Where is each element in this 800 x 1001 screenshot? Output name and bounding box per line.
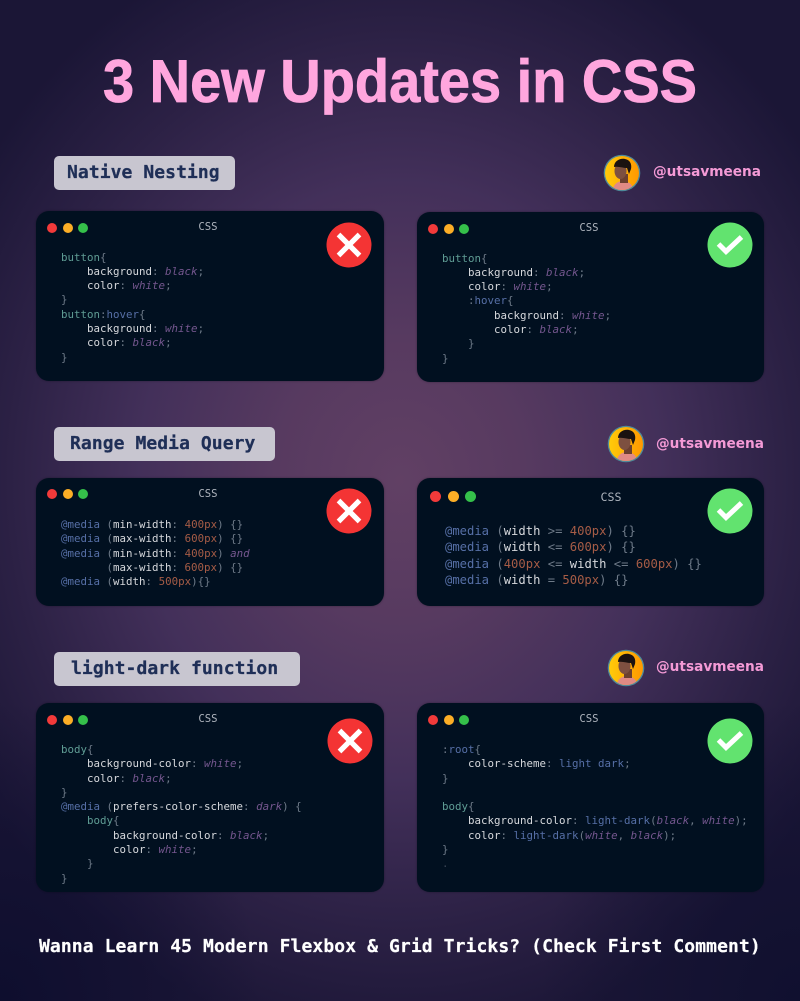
code: range before: @media (min-width: 400px) {} @media (max-width: 600px) {} @media (min-width: 400px) and (max-width: 600px) {} @media (width: 500px){} (61, 518, 250, 588)
icon: green check (708, 488, 752, 534)
window controls (47, 223, 88, 233)
code: light-dark after: :root{ color-scheme: light dark; } body{ background-color: light-dark(black, white); color: light-dark(white, black); } . (442, 743, 748, 870)
window title: CSS (579, 713, 599, 725)
heading: Native Nesting: Native Nesting (67, 162, 220, 183)
code: nested before: button{ background: black; color: white; } button:hover{ background: white; color: black; } (61, 250, 204, 364)
window controls (430, 491, 476, 502)
handle: section 2: @utsavmeena (656, 436, 764, 452)
window title: CSS (579, 222, 599, 234)
title: 3 New Updates in CSS (103, 48, 697, 115)
heading: Range Media Query: Range Media Query (70, 433, 255, 454)
heading: light-dark function: light-dark function (71, 658, 278, 679)
icon: green check (708, 718, 752, 764)
heading: light-dark function (54, 652, 300, 686)
icon: green check (708, 222, 752, 268)
heading: Range Media Query (54, 427, 275, 461)
panel: range media query after (417, 478, 764, 606)
panel: range media query before (36, 478, 384, 606)
code: light-dark before: body{ background-color: white; color: black; } @media (prefers-color-scheme: dark) { body{ background-color: black; color: white; } } (61, 743, 302, 885)
panel: light-dark before (36, 703, 384, 892)
handle: section 1: @utsavmeena (653, 164, 761, 180)
window controls (47, 489, 88, 499)
window title: CSS (601, 490, 621, 504)
icon: red cross (326, 488, 372, 534)
window title: CSS (198, 488, 218, 500)
avatar: section 3 (608, 650, 644, 686)
window controls (47, 715, 88, 725)
window title: CSS (198, 713, 218, 725)
code: range after: @media (width >= 400px) {} @media (width <= 600px) {} @media (400px <= width <= 600px) {} @media (width = 500px) {} (445, 524, 702, 587)
icon: red cross (328, 718, 372, 764)
avatar: section 2 (608, 426, 644, 462)
handle: section 3: @utsavmeena (656, 659, 764, 675)
panel: light-dark after (417, 703, 764, 892)
footer call to action: Wanna Learn 45 Modern Flexbox & Grid Tricks? (Check First Comment) (39, 936, 761, 957)
window controls (428, 224, 469, 234)
code: nested after: button{ background: black; color: white; :hover{ background: white; color: black; } } (442, 252, 611, 365)
window title: CSS (198, 221, 218, 233)
avatar: section 1 (604, 154, 640, 192)
window controls (428, 715, 469, 725)
panel: native nesting after (417, 212, 764, 382)
heading: Native Nesting (54, 156, 235, 190)
icon: red cross (326, 222, 372, 268)
panel: native nesting before (36, 211, 384, 381)
